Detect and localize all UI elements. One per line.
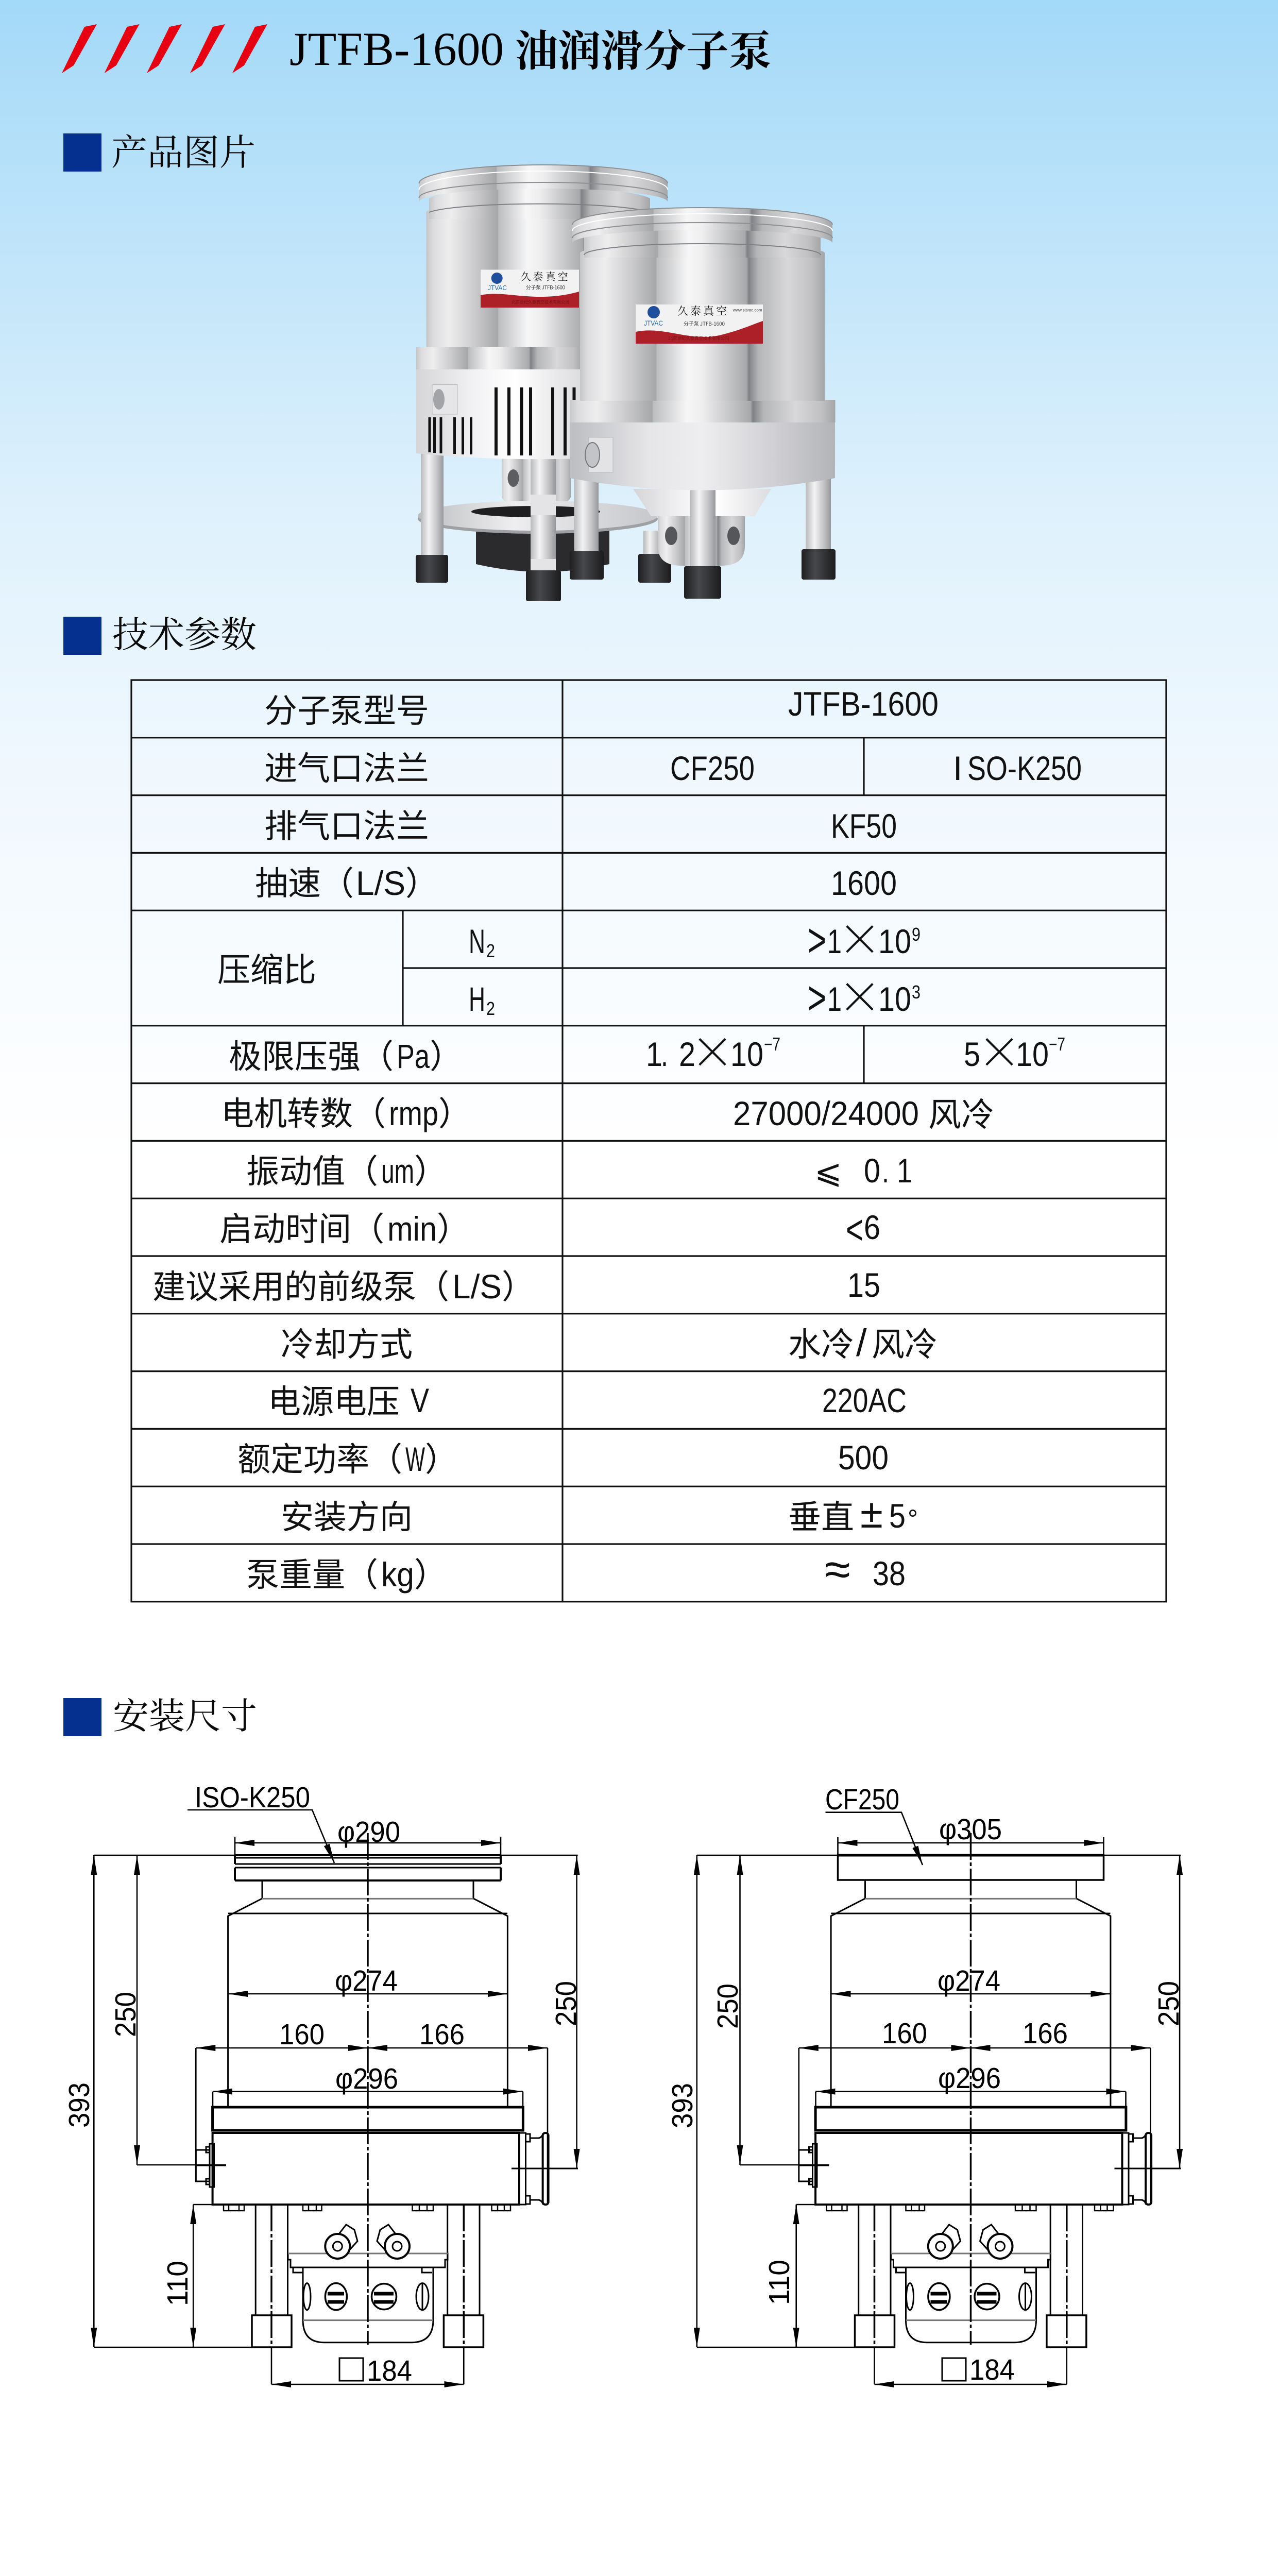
specification table [131, 680, 1166, 1602]
dimension labels: 160 [279, 2018, 325, 2051]
row: compression ratio: 2 [486, 998, 495, 1019]
row: ultimate pressure: 10 [1016, 1035, 1049, 1073]
row: ultimate pressure: −7 [764, 1033, 780, 1055]
flange and leader [188, 1810, 501, 1880]
row: start time: ） [437, 1211, 470, 1248]
row: backing pump: 建议采用的前级泵（ [152, 1268, 449, 1306]
dimension labels [63, 1781, 583, 2387]
row: vibration: 振动值（ [246, 1153, 378, 1190]
pump: rear unit: 北京世纪久泰真空技术有限公司 [512, 299, 569, 305]
row: power: 500 [838, 1438, 889, 1477]
row: inlet flange: CF250 [670, 749, 755, 787]
dimension labels: 184 [367, 2354, 412, 2387]
row: vibration: um [381, 1152, 414, 1190]
row: backing pump: ） [502, 1268, 535, 1306]
dimension labels: φ296 [938, 2062, 1001, 2095]
row: outlet flange: KF50 [831, 807, 897, 845]
row: inlet flange: 进气口法兰 [264, 750, 429, 787]
row: inlet flange: I [953, 749, 962, 787]
row: pump model [264, 685, 939, 730]
dimension labels: CF250 [825, 1783, 899, 1816]
dimension labels: 250 [1152, 1981, 1185, 2026]
row: ultimate pressure: ） [430, 1038, 463, 1075]
row: compression ratio: 10 [878, 922, 911, 960]
dimension labels: φ296 [335, 2062, 398, 2095]
dimension labels: φ274 [335, 1964, 398, 1997]
row: mounting: ± [860, 1490, 883, 1536]
product label: 北京世纪久泰真空技术有限公司 [669, 335, 729, 342]
dimension labels: 110 [161, 2261, 194, 2306]
row: ultimate pressure: 2 [679, 1035, 695, 1073]
drawing 1: ISO-K250 air cooled [63, 1781, 583, 2387]
row: inlet flange: SO-K250 [967, 749, 1082, 787]
product label: 分子泵 JTFB-1600 [684, 319, 725, 327]
dimension labels: 110 [763, 2260, 796, 2305]
row: compression ratio: × [838, 963, 881, 1026]
table grid [131, 680, 1166, 1602]
row: outlet flange [264, 807, 897, 845]
row: pumping speed [255, 864, 897, 902]
dimension labels: 393 [63, 2082, 96, 2128]
pump: front unit [570, 208, 836, 599]
title: JTFB-1600 [289, 23, 504, 75]
row: compression ratio: N [469, 922, 485, 960]
row: compression ratio: 9 [912, 924, 921, 945]
row: voltage: 电源电压 [268, 1383, 400, 1420]
row: weight: 泵重量（ [246, 1556, 378, 1594]
row: cooling: / [856, 1321, 867, 1364]
row: weight: 38 [873, 1554, 906, 1592]
heading: product picture: 产品图片 [111, 133, 255, 173]
heading: technical parameters: 技术参数 [112, 616, 257, 655]
dimension labels: 250 [550, 1981, 583, 2026]
dimension labels: ISO-K250 [195, 1781, 310, 1814]
row: motor speed: 电机转数（ [221, 1095, 386, 1132]
row: power: ） [425, 1441, 458, 1478]
row: motor speed [221, 1094, 994, 1133]
row: compression ratio: 2 [486, 940, 495, 961]
row: weight: kg [381, 1555, 414, 1594]
row: voltage: 220AC [822, 1381, 907, 1419]
pump: rear unit: JTVAC [488, 284, 507, 292]
row: ultimate pressure: 10 [730, 1035, 763, 1073]
dimension labels: φ305 [939, 1813, 1002, 1846]
row: mounting [281, 1490, 918, 1536]
row: power: W [405, 1440, 425, 1478]
row: compression ratio: 1 [827, 980, 842, 1018]
row: cooling [281, 1321, 938, 1364]
row: ultimate pressure: × [691, 1019, 734, 1081]
row: compression ratio: H [469, 980, 485, 1018]
row: compression ratio [217, 906, 921, 1026]
row: mounting: ° [908, 1504, 918, 1533]
dimension labels: 166 [419, 2018, 465, 2051]
row: start time: 6 [864, 1208, 880, 1246]
row: compression ratio: 压缩比 [217, 952, 316, 989]
title decoration: five red slashes [62, 24, 267, 73]
row: compression ratio: × [838, 906, 881, 968]
dimension labels: φ274 [938, 1964, 1000, 1997]
row: start time: < [846, 1207, 863, 1252]
product label: 久泰真空 [677, 303, 729, 318]
row: start time: min [387, 1210, 437, 1248]
row: motor speed: ） [438, 1095, 471, 1132]
row: compression ratio: 3 [912, 981, 921, 1003]
row: motor speed: 27000/24000 [733, 1094, 919, 1132]
row: backing pump [152, 1266, 880, 1306]
row: backing pump: L/S [452, 1267, 502, 1306]
row: compression ratio: > [808, 972, 826, 1024]
title [289, 23, 772, 75]
row: vibration: 1 [897, 1151, 912, 1190]
row: ultimate pressure: Pa [397, 1037, 430, 1075]
row: voltage: V [411, 1381, 429, 1419]
row: inlet flange [264, 749, 1082, 787]
pump: rear unit: 久泰真空 [521, 268, 570, 283]
row: compression ratio: 10 [878, 980, 911, 1018]
row: cooling: 冷却方式 [281, 1326, 413, 1363]
row: start time: 启动时间（ [219, 1211, 384, 1248]
row: power: 额定功率（ [237, 1441, 402, 1478]
row: mounting: 安装方向 [281, 1499, 413, 1536]
row: backing pump: 15 [847, 1266, 880, 1304]
product photo: two molecular pumps [416, 165, 836, 601]
row: power [237, 1438, 889, 1478]
dimension labels: 166 [1023, 2017, 1068, 2050]
row: pumping speed: 抽速（ [255, 865, 354, 902]
row: pumping speed: L/S [356, 864, 405, 902]
heading: installation dimensions: 安装尺寸 [113, 1697, 257, 1737]
pump: rear unit: 分子泵 JTFB-1600 [526, 283, 565, 291]
product label: JTVAC [644, 319, 663, 327]
dimension labels: 250 [711, 1984, 744, 2029]
row: cooling: 风冷 [872, 1326, 938, 1363]
row: pump model: JTFB-1600 [788, 685, 939, 723]
row: pumping speed: ） [405, 865, 438, 902]
flange and leader [825, 1812, 1103, 1880]
product label [636, 303, 763, 344]
row: compression ratio: 1 [827, 922, 842, 960]
row: ultimate pressure: 极限压强（ [229, 1038, 394, 1075]
row: compression ratio: > [808, 914, 826, 967]
row: voltage [268, 1381, 907, 1420]
row: mounting: 5 [889, 1497, 906, 1535]
pump: rear unit [416, 165, 671, 601]
row: ultimate pressure: 1 [646, 1035, 662, 1073]
dimension labels: 160 [882, 2017, 927, 2050]
product label: www.sjtvac.com [732, 308, 762, 312]
row: weight: ≈ [825, 1544, 850, 1596]
dimension labels [666, 1783, 1185, 2386]
row: motor speed: 风冷 [928, 1096, 994, 1133]
row: ultimate pressure: −7 [1049, 1033, 1065, 1055]
row: weight: ） [414, 1556, 447, 1594]
dimension labels: φ290 [337, 1816, 400, 1849]
row: cooling: 水冷 [788, 1326, 854, 1363]
row: vibration: ⩽ [814, 1153, 842, 1190]
row: ultimate pressure: . [661, 1035, 668, 1073]
row: motor speed: rmp [389, 1094, 438, 1132]
row: outlet flange: 排气口法兰 [264, 808, 429, 845]
dimension labels: 250 [109, 1992, 142, 2037]
row: vibration: ） [414, 1153, 447, 1190]
drawing 2: CF250 air cooled [666, 1783, 1185, 2386]
title: 油润滑分子泵 [515, 28, 772, 75]
row: vibration [246, 1151, 912, 1190]
row: vibration: 0 [864, 1151, 880, 1190]
row: pumping speed: 1600 [831, 864, 897, 902]
row: pump model: 分子泵型号 [264, 692, 429, 730]
row: weight [246, 1544, 906, 1596]
dimension labels: 393 [666, 2083, 699, 2128]
row: mounting: 垂直 [788, 1499, 854, 1536]
row: ultimate pressure [229, 1019, 1065, 1081]
row: ultimate pressure: 5 [964, 1035, 980, 1073]
row: vibration: . [882, 1151, 889, 1190]
row: start time [219, 1207, 880, 1252]
row: ultimate pressure: × [978, 1019, 1021, 1081]
dimension labels: 184 [969, 2353, 1015, 2386]
